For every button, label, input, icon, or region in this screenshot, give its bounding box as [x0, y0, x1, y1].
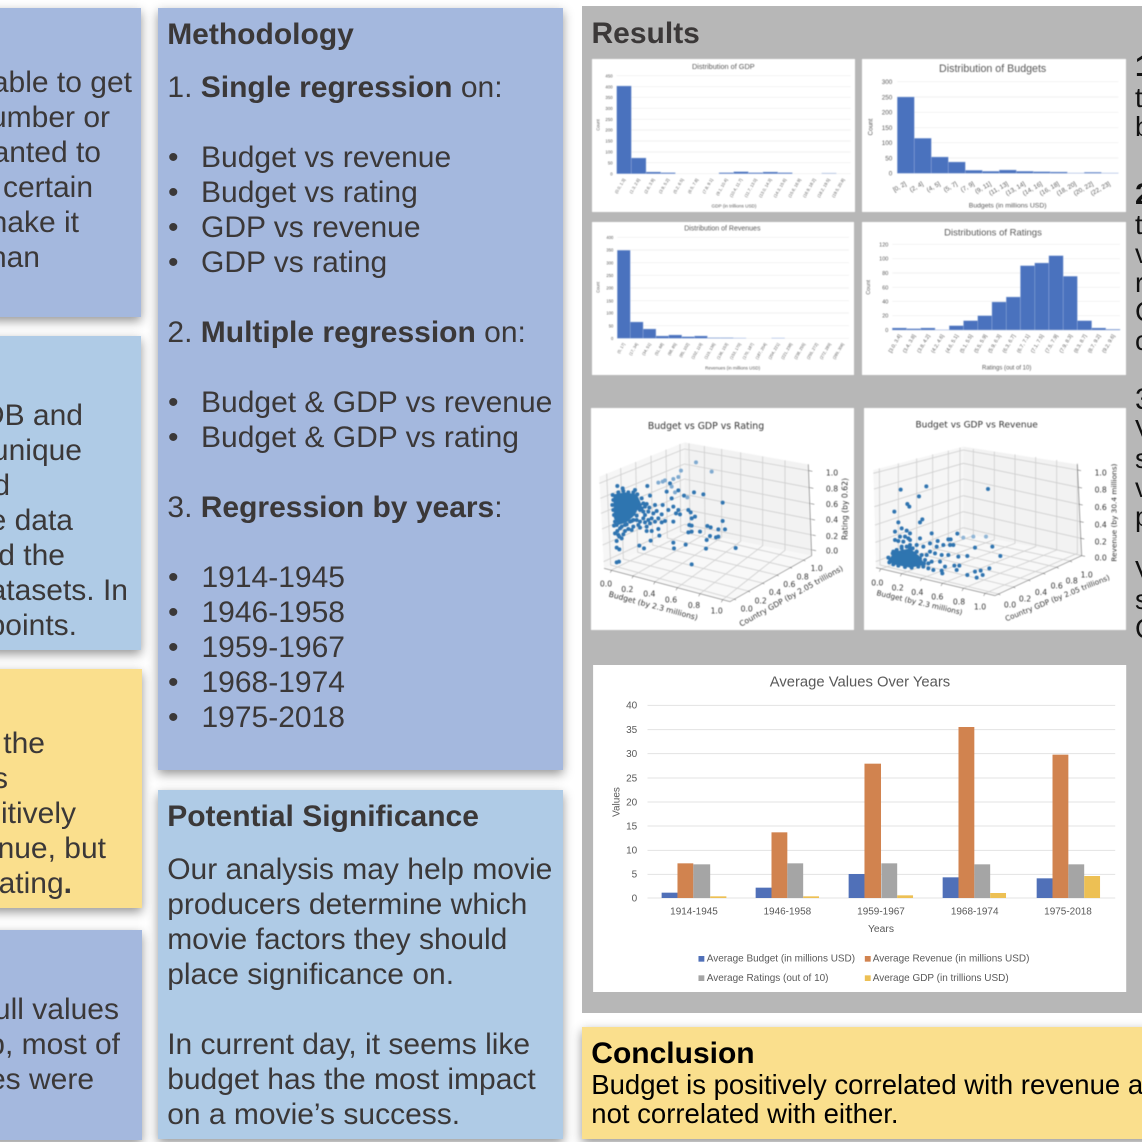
- bars: average budget: [662, 874, 1053, 898]
- legend: Average GDP (in trillions USD): [873, 973, 1009, 984]
- chart: 3D scatter budget vs GDP vs revenue: Budget (by 2.3 millions): [876, 588, 964, 617]
- chart: average values over years: 1914-1945: [670, 907, 718, 918]
- chart: 3D scatter budget vs GDP vs rating: Country GDP (by 2.05 trillions): [738, 564, 845, 628]
- chart: distributions of ratings: [862, 222, 1126, 376]
- chart: distribution of GDP: (14.3, 15.6]: [772, 178, 787, 198]
- chart: distribution of budgets: (18, 20]: [1056, 181, 1078, 197]
- chart: distribution of budgets: (7, 9]: [960, 181, 976, 194]
- panel: results: [582, 6, 1142, 1013]
- chart: 3D scatter budget vs GDP vs revenue: 0.0: [1004, 601, 1016, 610]
- chart: distributions of ratings: (5.9, 6.3]: [987, 333, 1003, 354]
- chart: distribution of revenues: Distribution of Revenues: [684, 226, 761, 233]
- chart: distributions of ratings: (7.9, 8.3]: [1059, 333, 1074, 354]
- text: hypothesis body: ating.: [0, 866, 72, 900]
- chart: 3D scatter budget vs GDP vs rating: 0.8: [826, 484, 838, 493]
- list: year ranges: •: [168, 630, 179, 664]
- chart: distribution of revenues: (289, 306]: [832, 342, 845, 360]
- chart: distribution of revenues: Revenues (in millions USD): [705, 366, 761, 371]
- chart: distributions of ratings: 20: [882, 314, 888, 320]
- chart: distribution of GDP: 450: [605, 73, 613, 78]
- list: multiple regression items: •: [168, 420, 179, 454]
- chart: 3D scatter budget vs GDP vs revenue: 1.0: [1095, 468, 1107, 477]
- text: significance paragraph 2: In current day, it seems like: [167, 1028, 530, 1060]
- chart: distribution of budgets: Budgets (in millions USD): [969, 202, 1047, 209]
- text: significance paragraph 2: on a movie’s success.: [167, 1098, 460, 1130]
- chart: 3D scatter budget vs GDP vs rating: 0.0: [826, 547, 838, 556]
- heading: Potential Significance: Potential Significance: [167, 800, 479, 832]
- chart: average values over years: Values: [611, 787, 622, 817]
- list: single regression items: [168, 140, 451, 278]
- chart: distribution of GDP: (9.1, 10.4]: [715, 178, 729, 196]
- chart: 3D scatter budget vs GDP vs rating: 0.2: [621, 585, 634, 594]
- panel: potential significance: [158, 790, 563, 1139]
- chart: distributions of ratings: Ratings (out of 10): [982, 366, 1031, 372]
- chart: distributions of ratings: (6.7, 7.1]: [1016, 333, 1032, 354]
- chart: distribution of revenues: (34, 51]: [641, 342, 652, 356]
- chart: distribution of budgets: 200: [882, 110, 893, 117]
- step 2: multiple regression: 2. Multiple regression on:: [167, 316, 526, 348]
- chart: 3D scatter budget vs GDP vs revenue: Country GDP (by 2.05 trillions): [1004, 573, 1111, 623]
- chart: distribution of revenues: (187, 204]: [754, 342, 768, 360]
- bars: average revenue: [677, 727, 1068, 898]
- chart: 3D scatter budget vs GDP vs rating: 0.6: [665, 595, 677, 604]
- list: single regression items: •: [168, 140, 179, 174]
- legend: Average Ratings (out of 10): [707, 973, 829, 984]
- chart: 3D scatter budget vs GDP vs rating: 0.2: [826, 532, 838, 541]
- text: significance paragraph 1: Our analysis may help movie: [167, 852, 552, 886]
- chart: distribution of budgets: (14, 16]: [1022, 181, 1044, 197]
- text: hypothesis body: nue, but: [0, 832, 106, 864]
- chart: 3D scatter budget vs GDP vs rating: 0.4: [643, 590, 656, 599]
- chart: distribution of revenues: (204, 221]: [767, 342, 781, 360]
- chart: distributions of ratings: (7.1, 7.5]: [1030, 333, 1046, 354]
- chart: 3D scatter budget vs GDP vs revenue: 0.2: [1095, 537, 1107, 546]
- chart: distribution of GDP: Count: [596, 118, 601, 131]
- chart: 3D scatter budget vs GDP vs rating: 1.0: [826, 468, 838, 477]
- chart: distributions of ratings: 100: [879, 257, 888, 263]
- chart: distributions of ratings: (5.1, 5.5]: [959, 333, 975, 354]
- chart: distribution of budgets: (20, 22]: [1073, 181, 1095, 197]
- chart: distribution of GDP: 50: [608, 160, 613, 165]
- chart: distributions of ratings: 40: [882, 299, 888, 305]
- chart: 3D scatter budget vs GDP vs revenue: 0.8: [953, 597, 965, 606]
- chart: distributions of ratings: (8.7, 9.2]: [1087, 333, 1103, 354]
- text: hypothesis body: the: [3, 726, 45, 760]
- legend: Average Budget (in millions USD): [707, 954, 855, 965]
- chart: distribution of budgets: (5, 7]: [943, 181, 959, 194]
- chart: distribution of GDP: (18.2, 19.5]: [816, 178, 831, 198]
- chart: distribution of budgets: 300: [882, 79, 893, 86]
- chart: 3D scatter budget vs GDP vs rating: Rating (by 0.62): [841, 478, 850, 540]
- list: year ranges: 1968-1974: [202, 666, 345, 698]
- panel: data challenges (cropped left): [0, 8, 141, 317]
- chart: 3D scatter budget vs GDP vs revenue: 0.6: [1051, 582, 1063, 591]
- chart: distribution of revenues: 150: [606, 298, 614, 303]
- chart: distributions of ratings: (3.4, 3.8]: [902, 333, 918, 354]
- scatter points: [888, 486, 1000, 578]
- text: significance paragraph 1: place significance on.: [167, 958, 454, 990]
- text: challenges body: [0, 66, 132, 274]
- chart: distribution of budgets: (4, 5]: [926, 181, 942, 194]
- chart: distributions of ratings: (3.8, 4.2]: [916, 333, 932, 354]
- chart: distribution of budgets: (16, 18]: [1039, 181, 1061, 197]
- chart: distributions of ratings: [3.0, 3.4]: [888, 333, 903, 354]
- chart: distributions of ratings: (4.6, 5.1]: [945, 333, 960, 354]
- legend: Average Revenue (in millions USD): [873, 954, 1029, 965]
- panel: hypothesis (cropped left): [0, 669, 142, 908]
- chart: distribution of revenues: 400: [606, 235, 614, 240]
- chart: distribution of GDP: (10.4, 11.7]: [729, 178, 743, 198]
- bars: average GDP: [710, 876, 1100, 898]
- chart: distribution of budgets: 150: [882, 125, 893, 132]
- chart: distribution of revenues: (136, 153]: [716, 342, 729, 360]
- chart: distribution of revenues: 100: [606, 311, 614, 316]
- text: hypothesis body: [0, 726, 106, 900]
- chart: average values over years: 0: [632, 893, 638, 904]
- chart: 3D scatter budget vs GDP vs rating: Budget (by 2.3 millions): [608, 590, 699, 622]
- chart: 3D scatter budget vs GDP vs revenue: 0.4: [1095, 521, 1107, 530]
- list: single regression items: GDP vs revenue: [201, 210, 421, 244]
- heading: Results: Results: [592, 16, 700, 50]
- text: significance paragraph 1: [167, 852, 552, 990]
- text: conclusion body: Budget is positively correlated with revenue a: [591, 1069, 1142, 1100]
- chart: 3D scatter budget vs GDP vs rating: 0.2: [755, 597, 767, 606]
- list: year ranges: •: [168, 666, 179, 698]
- list: year ranges: 1946-1958: [202, 596, 345, 628]
- chart: average values over years: Years: [868, 924, 894, 935]
- chart: 3D scatter budget vs GDP vs revenue: 0.8: [1095, 486, 1107, 495]
- list: year ranges: 1975-2018: [202, 700, 345, 734]
- chart: 3D scatter budget vs GDP vs revenue: 1.0: [974, 602, 986, 611]
- chart: distribution of GDP: 100: [605, 150, 613, 155]
- chart: distribution of GDP: (6.5, 7.8]: [687, 178, 699, 194]
- chart: 3D scatter budget vs GDP vs rating: 0.8: [688, 601, 700, 610]
- panel: data sources (cropped left): [0, 336, 141, 650]
- chart: distribution of budgets: (9, 11]: [974, 181, 993, 195]
- panel: conclusion: [582, 1027, 1142, 1139]
- chart: distribution of revenues: (17, 34]: [628, 342, 639, 356]
- chart: 3D scatter budget vs GDP vs rating: 0.6: [826, 500, 838, 509]
- bars: average ratings: [693, 863, 1084, 898]
- chart: distributions of ratings: 120: [879, 242, 888, 248]
- chart: distribution of GDP: (5.2, 6.5]: [672, 178, 685, 194]
- text: conclusion body: not correlated with either.: [591, 1098, 899, 1129]
- chart: distribution of revenues: (102, 119]: [690, 342, 703, 360]
- chart: distributions of ratings: (7.5, 7.9]: [1044, 333, 1060, 354]
- chart: 3D scatter budget vs GDP vs revenue: Budget vs GDP vs Revenue: [915, 420, 1038, 430]
- text: significance paragraph 1: movie factors they should: [167, 922, 507, 956]
- chart: average values over years: 5: [632, 870, 638, 881]
- text: hypothesis body: itively: [1, 796, 76, 830]
- chart: 3D scatter budget vs GDP vs rating: 0.6: [783, 580, 796, 589]
- chart: distribution of revenues: 200: [606, 286, 614, 291]
- text: challenges body: certain: [3, 170, 93, 204]
- chart: 3D scatter budget vs GDP vs revenue: 0.4: [911, 588, 924, 597]
- chart: 3D scatter budget vs GDP vs rating: 0.4: [769, 588, 781, 597]
- chart: distributions of ratings: Count: [866, 280, 872, 295]
- chart: distribution of GDP: (2.6, 3.9]: [643, 178, 656, 194]
- chart: distribution of GDP: Distribution of GDP: [692, 62, 755, 71]
- list: year ranges: •: [168, 560, 179, 594]
- chart: distribution of revenues: (119, 136]: [703, 342, 716, 360]
- text: significance paragraph 2: [167, 1028, 536, 1130]
- list: year ranges: [168, 560, 345, 734]
- list: multiple regression items: •: [168, 386, 179, 418]
- chart: distribution of budgets: 250: [882, 94, 893, 101]
- list: year ranges: •: [168, 596, 179, 628]
- chart: distribution of revenues: 250: [606, 273, 614, 278]
- panel: data cleaning (cropped left): [0, 930, 142, 1140]
- chart: distribution of GDP: (3.9, 5.2]: [658, 178, 670, 194]
- list: single regression items: Budget vs revenue: [201, 140, 451, 174]
- chart: average values over years: 1959-1967: [857, 907, 905, 918]
- chart: 3D scatter budget vs GDP vs revenue: 0.2: [892, 583, 904, 592]
- text: significance paragraph 1: producers determine which: [167, 888, 527, 920]
- chart: distribution of revenues: (221, 238]: [780, 342, 793, 360]
- chart: 3D scatter budget vs GDP vs rating: 0.4: [826, 516, 838, 525]
- chart: distribution of GDP: (7.8, 9.1]: [701, 178, 714, 194]
- chart: distribution of GDP: GDP (in trillions USD): [712, 204, 757, 209]
- text: data sources body: [0, 398, 128, 642]
- chart: distribution of GDP: [592, 58, 856, 212]
- list: single regression items: •: [168, 176, 179, 208]
- scatter points: [612, 462, 736, 564]
- chart: average values over years: 30: [626, 749, 638, 760]
- chart: distributions of ratings: (8.3, 8.7]: [1073, 333, 1089, 354]
- chart: distribution of revenues: (85, 102]: [678, 342, 690, 358]
- chart: average values over years: 35: [626, 725, 638, 736]
- chart: average values over years: Average Values Over Years: [770, 675, 950, 690]
- text: cropped results notes: [1135, 50, 1142, 644]
- chart: distribution of GDP: (0.0, 1.3]: [614, 178, 626, 194]
- chart: distribution of revenues: (51, 68]: [653, 342, 665, 356]
- chart: distribution of GDP: 200: [605, 128, 613, 133]
- text: data cleaning body: [0, 992, 120, 1096]
- chart: distribution of revenues: 350: [606, 248, 614, 253]
- chart: 3D scatter budget vs GDP vs revenue: 0.4: [1035, 588, 1047, 597]
- heading: Methodology: Methodology: [167, 18, 354, 50]
- chart: 3D scatter budget vs GDP vs revenue: 0.0: [871, 578, 884, 587]
- text: data sources body: d the: [0, 538, 65, 572]
- chart: distribution of GDP: 250: [605, 117, 613, 122]
- legend: [698, 954, 1029, 984]
- chart: distribution of revenues: (170, 187]: [741, 342, 755, 360]
- list: multiple regression items: Budget & GDP vs rating: [201, 420, 519, 454]
- heading: Conclusion: Conclusion: [591, 1036, 755, 1070]
- chart: distribution of revenues: Count: [595, 281, 600, 293]
- chart: distributions of ratings: (4.2, 4.6]: [930, 333, 946, 354]
- chart: distribution of GDP: 350: [605, 95, 613, 100]
- chart: distributions of ratings: (5.5, 5.9]: [973, 333, 989, 354]
- chart: distribution of budgets: Distribution of Budgets: [939, 63, 1046, 75]
- chart: distribution of revenues: 50: [609, 323, 614, 328]
- chart: 3D scatter budget vs GDP vs revenue: Revenue (by 30.4 millions): [1109, 463, 1118, 562]
- chart: distribution of revenues: (153, 170]: [729, 342, 742, 360]
- chart: distribution of budgets: [0, 2]: [892, 181, 908, 194]
- chart: average values over years: 1946-1958: [763, 907, 812, 918]
- list: year ranges: •: [168, 700, 179, 734]
- chart: average values over years: 1968-1974: [951, 907, 999, 918]
- chart: 3D scatter budget vs GDP vs revenue: 0.0: [1095, 553, 1107, 562]
- chart: distribution of budgets: Count: [867, 118, 874, 135]
- chart: average values over years: 10: [626, 846, 638, 857]
- text: significance paragraph 2: budget has the most impact: [167, 1062, 536, 1096]
- chart: distributions of ratings: (9.2, 9.6]: [1101, 333, 1117, 354]
- chart: distribution of budgets: (11, 13]: [988, 181, 1010, 197]
- list: single regression items: GDP vs rating: [201, 246, 387, 278]
- chart: distribution of budgets: 100: [882, 140, 893, 147]
- list: year ranges: 1914-1945: [202, 560, 345, 594]
- chart: distribution of revenues: (272, 289]: [819, 342, 832, 360]
- list: multiple regression items: Budget & GDP vs revenue: [201, 386, 552, 418]
- chart: 3D scatter budget vs GDP vs rating: 0.8: [797, 572, 809, 581]
- list: single regression items: Budget vs rating: [201, 176, 418, 208]
- chart: average values over years: 1975-2018: [1044, 907, 1092, 918]
- chart: distributions of ratings: 60: [882, 285, 888, 291]
- chart: distribution of GDP: 300: [605, 106, 613, 111]
- chart: distribution of revenues: 300: [606, 260, 614, 265]
- chart: 3D scatter budget vs GDP vs rating: 0.0: [600, 579, 612, 588]
- chart: 3D scatter budget vs GDP vs revenue: 1.0: [1081, 571, 1093, 580]
- chart: distribution of budgets: (22, 23]: [1090, 181, 1112, 197]
- chart: distribution of revenues: (0, 17]: [616, 342, 626, 354]
- chart: distributions of ratings: 0: [885, 328, 888, 334]
- chart: distribution of revenues: [592, 222, 854, 376]
- chart: distribution of GDP: (13.0, 14.3]: [758, 178, 773, 198]
- chart: 3D scatter budget vs GDP vs rating: 1.0: [811, 564, 823, 573]
- chart: distribution of GDP: 150: [605, 139, 613, 144]
- chart: 3D scatter budget vs GDP vs revenue: 0.8: [1066, 576, 1078, 585]
- chart: distributions of ratings: 80: [882, 271, 888, 277]
- step 3: regression by years: 3. Regression by years:: [167, 490, 503, 524]
- chart: distribution of revenues: (255, 272]: [806, 342, 819, 360]
- chart: average values over years: 25: [626, 773, 638, 784]
- chart: 3D scatter budget vs GDP vs rating: 0.0: [741, 605, 753, 614]
- list: year ranges: 1959-1967: [202, 630, 345, 664]
- chart: average values over years: 15: [626, 821, 638, 832]
- chart: distribution of GDP: (19.5, 20.8]: [831, 178, 846, 198]
- chart: distributions of ratings: (6.3, 6.7]: [1002, 333, 1017, 354]
- chart: average values over years: 40: [626, 701, 638, 712]
- chart: 3D scatter budget vs GDP vs revenue: 0.6: [931, 592, 944, 601]
- panel: methodology: [158, 8, 563, 770]
- chart: 3D scatter budget vs GDP vs rating: 1.0: [711, 607, 723, 616]
- chart: 3D scatter budget vs GDP vs revenue: 0.2: [1019, 594, 1031, 603]
- chart: distribution of revenues: (68, 85]: [666, 342, 678, 356]
- chart: distribution of budgets: 0: [889, 171, 893, 178]
- chart: distribution of budgets: (13, 14]: [1005, 181, 1027, 197]
- chart: distribution of GDP: 400: [605, 84, 613, 89]
- chart: distribution of budgets: (2, 4]: [909, 181, 925, 194]
- chart: distribution of revenues: 0: [611, 336, 614, 341]
- chart: distribution of GDP: (15.6, 16.9]: [787, 178, 802, 198]
- chart: average values over years: [593, 665, 1126, 992]
- list: single regression items: •: [168, 246, 179, 278]
- chart: distribution of GDP: (16.9, 18.2]: [802, 178, 817, 198]
- chart: distribution of budgets: [862, 58, 1126, 212]
- step 1: single regression: 1. Single regression on:: [167, 70, 503, 104]
- chart: 3D scatter budget vs GDP vs revenue: [864, 408, 1126, 630]
- chart: distribution of GDP: (1.3, 2.6]: [628, 178, 641, 194]
- list: single regression items: •: [168, 210, 179, 244]
- chart: average values over years: 20: [626, 797, 638, 808]
- chart: distribution of GDP: (11.7, 13.0]: [743, 178, 758, 198]
- chart: 3D scatter budget vs GDP vs rating: Budget vs GDP vs Rating: [648, 421, 764, 432]
- chart: distribution of budgets: 50: [885, 155, 893, 162]
- chart: 3D scatter budget vs GDP vs revenue: 0.6: [1095, 503, 1107, 512]
- chart: distributions of ratings: Distributions of Ratings: [944, 227, 1042, 238]
- list: multiple regression items: [168, 386, 552, 454]
- chart: distribution of revenues: (238, 255]: [793, 342, 806, 360]
- chart: distribution of GDP: 0: [610, 171, 613, 176]
- text: conclusion body: [591, 1069, 1142, 1129]
- chart: 3D scatter budget vs GDP vs rating: [590, 408, 854, 630]
